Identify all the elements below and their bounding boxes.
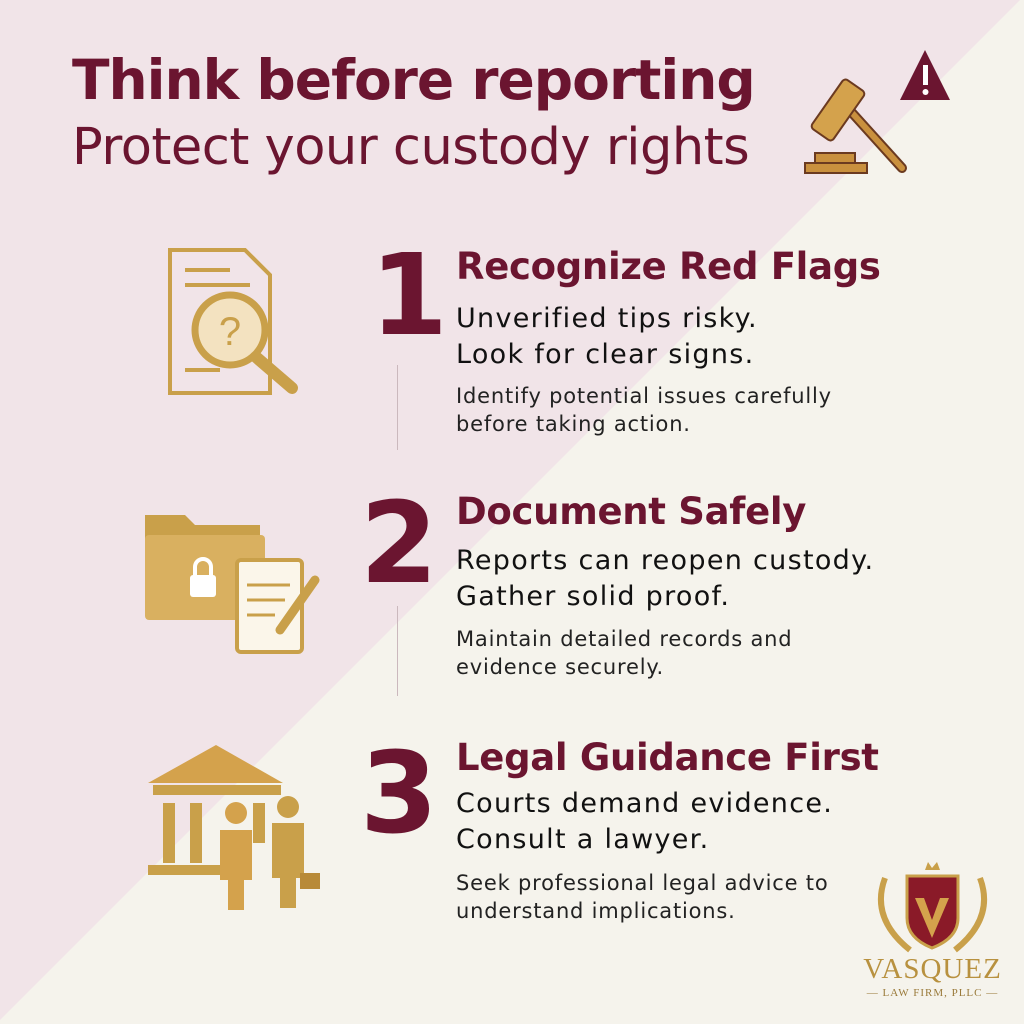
section 3: Courts demand evidence. [456, 788, 833, 819]
section 2: Reports can reopen custody. [456, 545, 874, 576]
section 1: Unverified tips risky. [456, 303, 758, 334]
section 1: Recognize Red Flags [456, 245, 881, 288]
logo: Vasquez Law Firm: — LAW FIRM, PLLC — [867, 987, 998, 999]
section 3: understand implications. [456, 899, 736, 923]
title: Think before reporting [72, 48, 755, 112]
icon: courthouse with handshake [148, 745, 320, 910]
section 1: 1 [370, 231, 448, 361]
section 3: Consult a lawyer. [456, 824, 710, 855]
section 1: before taking action. [456, 412, 691, 436]
section 3: Seek professional legal advice to [456, 871, 828, 895]
subtitle: Protect your custody rights [72, 118, 749, 177]
icon: document with magnifier: ? [219, 310, 241, 354]
section 2 [360, 479, 874, 696]
icon: document with magnifier [168, 248, 298, 395]
icon: folder with lock and notepad [145, 515, 320, 654]
section 2: evidence securely. [456, 655, 664, 679]
section 3 [360, 729, 879, 923]
section 2: Document Safely [456, 490, 806, 533]
logo: Vasquez Law Firm [863, 862, 1002, 999]
section 1: Look for clear signs. [456, 339, 754, 370]
section 2: 2 [360, 479, 438, 609]
logo: Vasquez Law Firm: VASQUEZ [863, 953, 1002, 985]
section 3: 3 [360, 729, 438, 859]
section 3: Legal Guidance First [456, 736, 879, 779]
section 2: Maintain detailed records and [456, 627, 792, 651]
section 2: Gather solid proof. [456, 581, 730, 612]
section 1 [370, 231, 881, 450]
section 1: Identify potential issues carefully [456, 384, 832, 408]
icon: gavel and warning [804, 50, 950, 174]
